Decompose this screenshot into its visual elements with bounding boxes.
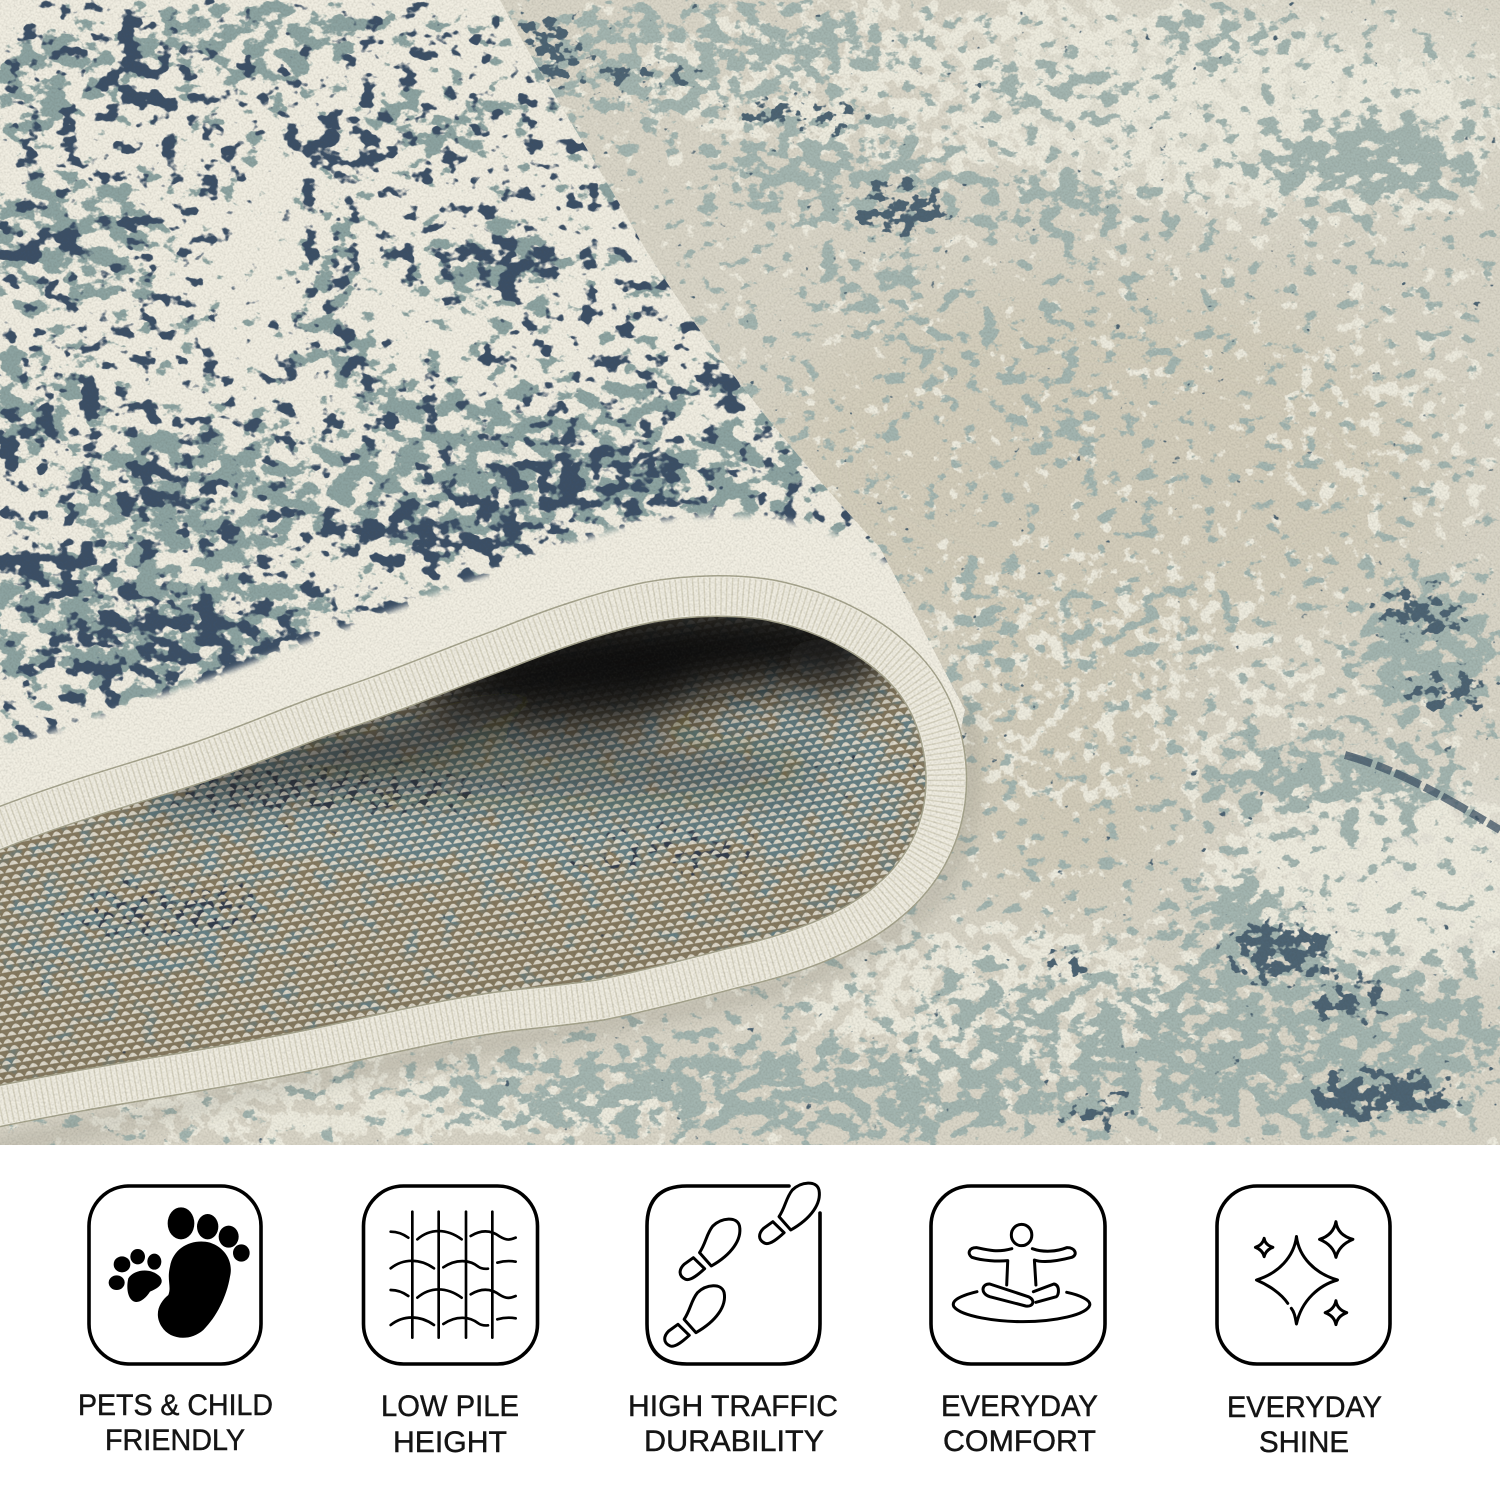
feature: everyday shine bbox=[1217, 1186, 1390, 1459]
dark stroke in floor pattern bbox=[1345, 755, 1500, 830]
rug underside weave bbox=[0, 617, 926, 1084]
label: high traffic durability: HIGH TRAFFIC bbox=[628, 1390, 838, 1423]
label: high traffic durability: DURABILITY bbox=[644, 1425, 824, 1458]
icon frame: broken outline bbox=[647, 1186, 820, 1364]
feature: low pile height bbox=[364, 1186, 538, 1459]
feature: high traffic durability bbox=[628, 1183, 838, 1458]
pile: navy pattern bbox=[0, 0, 965, 748]
icon: woven pile grid bbox=[391, 1212, 516, 1338]
label: low pile height: LOW PILE bbox=[381, 1390, 519, 1423]
flat rug floor bbox=[0, 0, 1500, 1150]
cream pile strip above binding bbox=[0, 554, 975, 795]
label: everyday shine: EVERYDAY bbox=[1227, 1391, 1382, 1424]
icon frame: foot and paw bbox=[89, 1186, 261, 1364]
icon: seated meditation figure bbox=[953, 1224, 1090, 1322]
pile: teal pattern bbox=[0, 0, 878, 750]
label: pets and child friendly: PETS & CHILD bbox=[78, 1389, 273, 1422]
icon frame: shine bbox=[1217, 1186, 1390, 1364]
feature: everyday comfort bbox=[931, 1186, 1105, 1458]
label: everyday shine: SHINE bbox=[1259, 1426, 1349, 1459]
floor: navy accents bbox=[0, 0, 1500, 1145]
rolled rug top surface bbox=[0, 0, 965, 806]
photo: rolled rug corner bbox=[0, 0, 1500, 1150]
icon: sparkles bbox=[1255, 1222, 1353, 1325]
icon frame: comfort bbox=[931, 1186, 1105, 1364]
underside: navy marks bbox=[6, 692, 916, 1066]
floor: teal pattern bbox=[0, 0, 1500, 1145]
underside: inner shadow bbox=[140, 587, 903, 823]
icon frame: pile bbox=[364, 1186, 538, 1364]
icon: footprints bbox=[665, 1183, 819, 1346]
label: everyday comfort: COMFORT bbox=[943, 1425, 1096, 1458]
label: low pile height: HEIGHT bbox=[393, 1426, 507, 1459]
feature: pets and child friendly bbox=[78, 1186, 273, 1457]
label: pets and child friendly: FRIENDLY bbox=[105, 1424, 245, 1457]
icon: foot and paw prints bbox=[109, 1207, 250, 1338]
floor: light speckle bbox=[0, 0, 1500, 1150]
roll shadow on floor bbox=[0, 700, 971, 1150]
label: everyday comfort: EVERYDAY bbox=[941, 1390, 1098, 1423]
pile grain bbox=[0, 0, 1500, 1145]
feature strip bbox=[0, 1145, 1500, 1500]
underside: teal yarn bbox=[0, 674, 926, 1078]
binding edge bbox=[0, 596, 946, 1108]
